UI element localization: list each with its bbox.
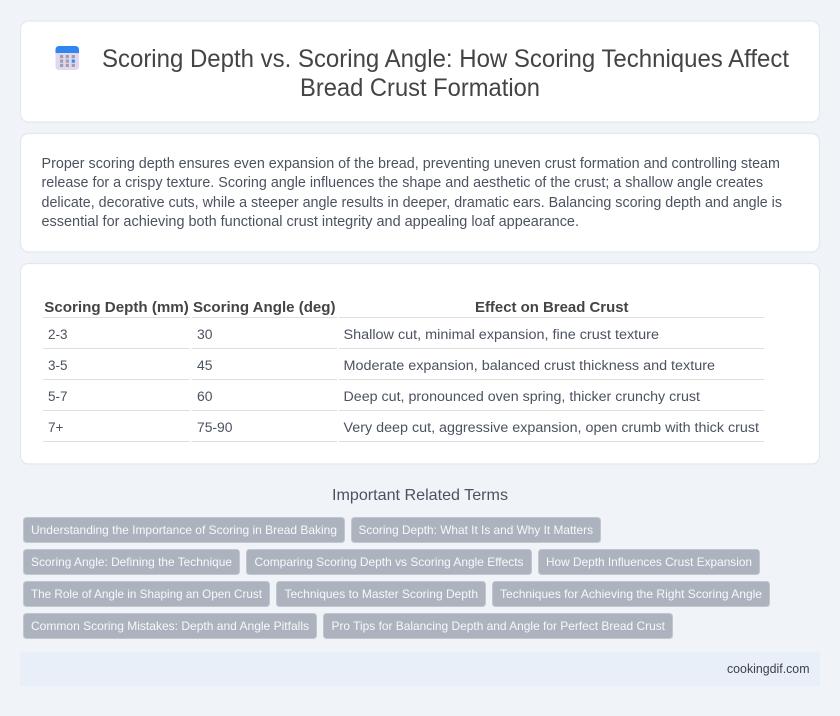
tag	[24, 550, 240, 574]
table row: 2-3 mm: Shallow cut, minimal expansion, fine crust texture	[344, 327, 659, 343]
tag: Comparing Scoring Depth vs Scoring Angle Effects	[254, 555, 524, 569]
title: Scoring Depth vs. Scoring Angle: How Scoring Techniques Affect	[102, 45, 789, 73]
table row: 3-5 mm: 3-5	[48, 358, 68, 374]
panel: title header	[20, 21, 820, 122]
text block: summary: release for a crispy texture. Scoring angle influences the shape and aesthetic of the crust; a shallow angle creates	[42, 175, 763, 191]
tag: Pro Tips for Balancing Depth and Angle for Perfect Bread Crust	[332, 619, 666, 633]
tag: Understanding the Importance of Scoring in Bread Baking	[31, 523, 337, 537]
tag	[276, 582, 486, 606]
title: Bread Crust Formation	[300, 74, 540, 102]
tag: Techniques for Achieving the Right Scoring Angle	[500, 587, 762, 601]
table header row: Scoring Depth (mm)	[44, 299, 189, 316]
table row: 3-5 mm: 45	[197, 358, 213, 374]
tag	[538, 550, 760, 574]
tag	[324, 614, 672, 638]
tag: Techniques to Master Scoring Depth	[284, 587, 478, 601]
icon: calendar	[56, 46, 79, 70]
table row: 5-7 mm: 60	[197, 389, 213, 405]
table row: 5-7 mm: Deep cut, pronounced oven spring, thicker crunchy crust	[344, 389, 700, 405]
table row: 2-3 mm	[48, 327, 659, 343]
table row: 7+ mm: 7+	[48, 420, 64, 436]
table row: 7+ mm: Very deep cut, aggressive expansion, open crumb with thick crust	[344, 420, 759, 436]
table row: 3-5 mm	[48, 358, 715, 374]
table row: 2-3 mm: 2-3	[48, 327, 68, 343]
table row: 7+ mm	[48, 420, 759, 436]
footer	[20, 652, 820, 686]
tag	[352, 518, 600, 542]
table row: 5-7 mm: 5-7	[48, 389, 68, 405]
table header row: Effect on Bread Crust	[475, 299, 628, 316]
panel: data table	[20, 264, 820, 464]
footer: cookingdif.com	[727, 661, 810, 676]
heading: important related terms: Important Related Terms	[332, 487, 508, 504]
table header row	[44, 299, 629, 316]
tag: The Role of Angle in Shaping an Open Crust	[31, 587, 263, 601]
tag	[246, 550, 532, 574]
tag: Common Scoring Mistakes: Depth and Angle Pitfalls	[31, 619, 309, 633]
text block: summary	[42, 156, 782, 230]
table row: 3-5 mm: Moderate expansion, balanced crust thickness and texture	[344, 358, 715, 374]
tag	[24, 614, 316, 638]
table row: 7+ mm: 75-90	[197, 420, 233, 436]
panel: summary paragraph	[20, 134, 820, 252]
tag: How Depth Influences Crust Expansion	[546, 555, 752, 569]
table row: 5-7 mm	[48, 389, 700, 405]
tag	[24, 582, 270, 606]
tag	[492, 582, 770, 606]
text block: summary: Proper scoring depth ensures even expansion of the bread, preventing uneven crust formation and controlling steam	[42, 156, 780, 172]
title	[102, 45, 789, 102]
text block: summary: essential for achieving both functional crust integrity and appealing loaf appearance.	[42, 214, 579, 230]
table rules	[43, 317, 764, 442]
tag: Scoring Angle: Defining the Technique	[31, 555, 232, 569]
table row: 2-3 mm: 30	[197, 327, 213, 343]
tag	[24, 518, 344, 542]
related term tags	[24, 518, 770, 638]
tag: Scoring Depth: What It Is and Why It Matters	[358, 523, 593, 537]
text block: summary: delicate, decorative cuts, while a steeper angle results in deeper, dramatic ears. Balancing scoring depth and angle is	[42, 195, 782, 211]
table header row: Scoring Angle (deg)	[193, 299, 336, 316]
